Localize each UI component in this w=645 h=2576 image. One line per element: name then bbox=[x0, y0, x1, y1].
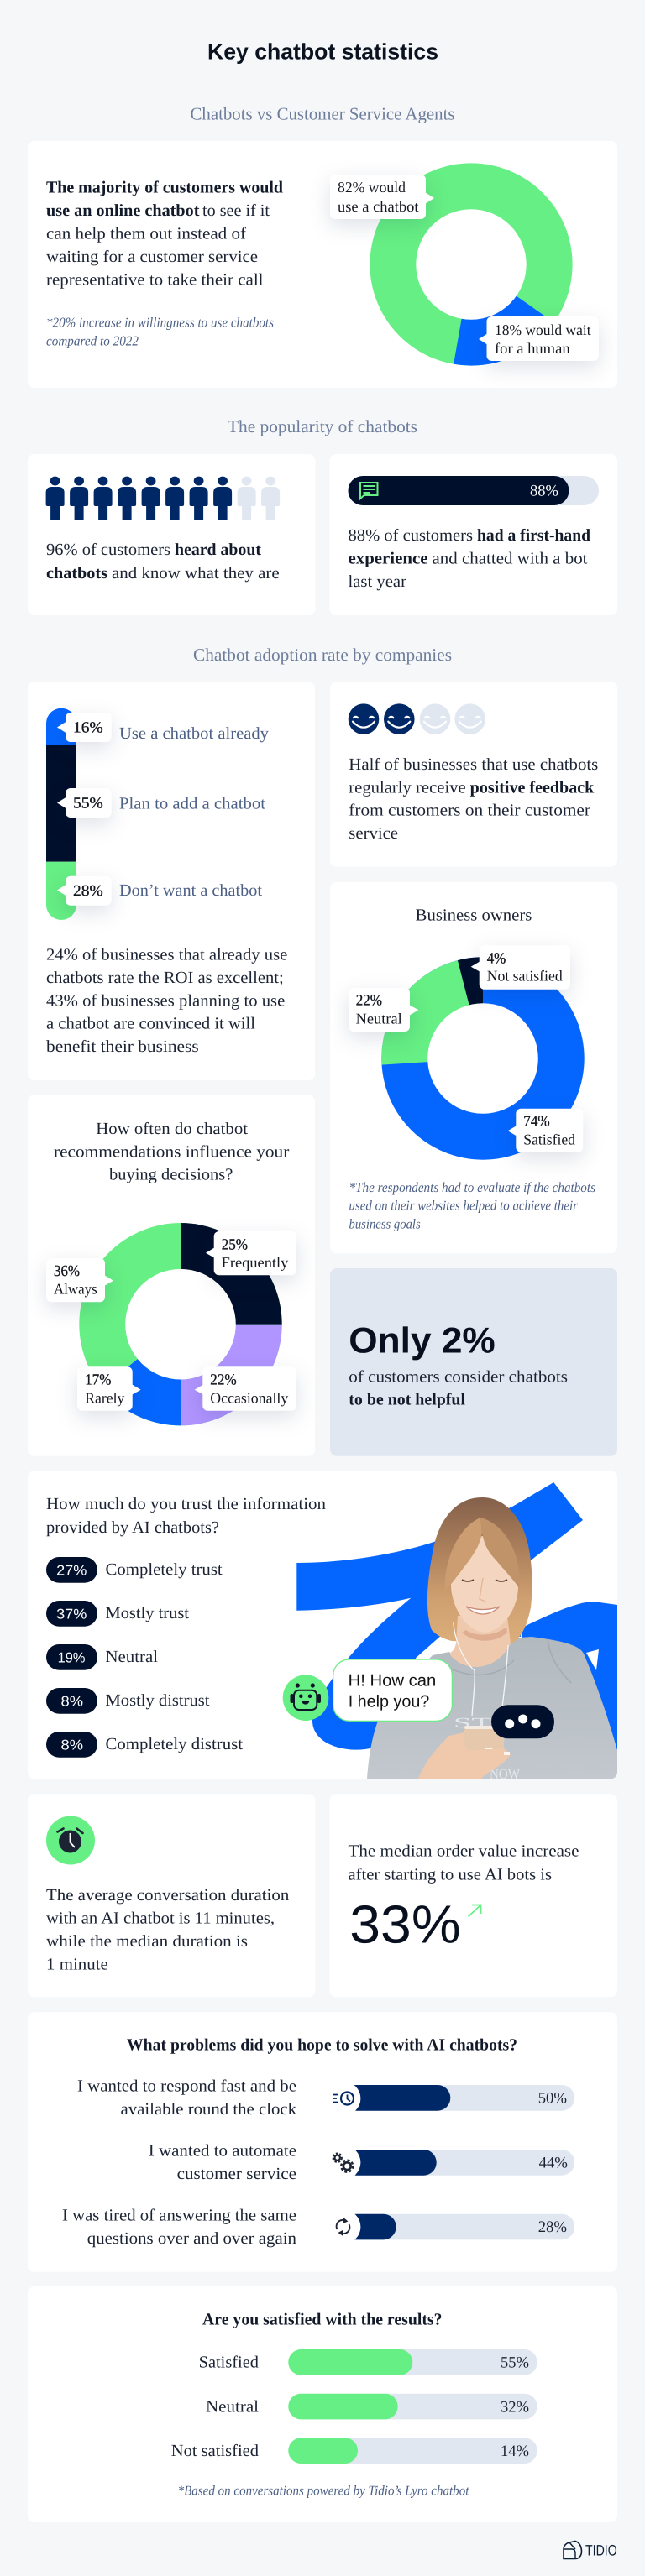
row: satisfied bbox=[199, 2349, 538, 2375]
heading: chatbots vs agents: Chatbots vs Customer Service Agents bbox=[190, 104, 455, 124]
chat bubble: hello: I help you? bbox=[349, 1693, 429, 1711]
illustration: woman with phone and chat bubbles: NOW bbox=[490, 1766, 521, 1782]
heading: business owners: Business owners bbox=[416, 907, 532, 925]
heading: buying decisions question: buying decisions? bbox=[109, 1166, 233, 1184]
logo: Tidio: TIDIO bbox=[585, 2542, 617, 2559]
text: first-hand experience bbox=[348, 526, 590, 591]
icon: fast clock bbox=[327, 2082, 360, 2115]
heading: trust question: How much do you trust the information bbox=[46, 1495, 326, 1513]
text: positive feedback: positive feedback bbox=[470, 778, 595, 797]
progress bar: 88% bbox=[348, 476, 599, 505]
text: majority statement: can help them out instead of bbox=[46, 225, 246, 243]
callout: 25% frequently: 25% bbox=[222, 1236, 248, 1253]
text: first-hand experience: 88% of customers bbox=[348, 526, 473, 545]
text: not helpful: to be not helpful bbox=[349, 1390, 465, 1408]
callout: 16% bbox=[57, 713, 112, 742]
illustration: woman with phone and chat bubbles: ST bbox=[454, 1715, 492, 1731]
callout: 4%: 4% bbox=[487, 950, 506, 967]
callout: 36% always: 36% bbox=[54, 1263, 80, 1280]
panel: first-hand experience bbox=[329, 454, 617, 615]
callout: 22% occasionally: Occasionally bbox=[210, 1389, 288, 1406]
text: not helpful bbox=[349, 1368, 568, 1408]
row: 27% completely trust: Completely trust bbox=[106, 1560, 223, 1579]
icon: chat document bbox=[360, 483, 378, 499]
row: satisfied: Satisfied bbox=[199, 2354, 259, 2372]
row: not satisfied bbox=[171, 2438, 538, 2464]
icon row: smileys bbox=[349, 703, 485, 734]
icon row: people 96% bbox=[46, 477, 280, 520]
text: heard about chatbots: 96% of customers bbox=[46, 541, 170, 559]
row: not satisfied: 14% bbox=[501, 2443, 529, 2460]
callout: 4%: Not satisfied bbox=[487, 968, 563, 985]
note: willingness increase: *20% increase in willingness to use chatbots bbox=[46, 314, 274, 331]
callout: 36% always bbox=[46, 1258, 113, 1302]
callout: 22% occasionally: 22% bbox=[210, 1372, 237, 1388]
callout: 82%: 82% would bbox=[338, 179, 406, 196]
text: order value bbox=[348, 1842, 579, 1884]
progress bar: 88%: 88% bbox=[530, 482, 558, 500]
panel: chatbots vs agents bbox=[28, 141, 617, 388]
callout: 55% bbox=[57, 788, 112, 818]
row: 27% completely trust: 27% bbox=[56, 1562, 87, 1578]
heading: trust question bbox=[46, 1495, 326, 1537]
text: majority statement bbox=[46, 178, 283, 289]
callout: 18% bbox=[479, 316, 599, 361]
row: respond fast bbox=[77, 2077, 574, 2119]
panel: business owners bbox=[330, 882, 617, 1253]
text: duration: 1 minute bbox=[46, 1956, 108, 1974]
label: don't want: Don’t want a chatbot bbox=[119, 881, 262, 900]
text: majority statement: waiting for a customer service bbox=[46, 248, 258, 266]
row: not satisfied: Not satisfied bbox=[171, 2442, 259, 2460]
text: heard about chatbots bbox=[46, 541, 280, 583]
icon: alarm clock bbox=[46, 1816, 95, 1865]
text: ROI paragraph: benefit their business bbox=[46, 1037, 199, 1056]
text: duration: while the median duration is bbox=[46, 1932, 248, 1951]
callout: 16%: 16% bbox=[73, 720, 103, 737]
row: tired of answering: I was tired of answering the same bbox=[62, 2207, 296, 2225]
text: heard about chatbots: heard about bbox=[175, 541, 261, 559]
panel: order value increase bbox=[329, 1794, 617, 1997]
callout: 22% occasionally bbox=[195, 1366, 296, 1411]
donut chart: chatbot vs human bbox=[370, 163, 573, 366]
text: first-hand experience: experience bbox=[348, 549, 428, 567]
callout: 55%: 55% bbox=[73, 796, 103, 813]
callout: 82% bbox=[330, 175, 434, 219]
text: duration bbox=[46, 1886, 289, 1974]
row: neutral: Neutral bbox=[206, 2397, 259, 2416]
donut chart: owners satisfaction bbox=[381, 957, 585, 1160]
row: 8% completely distrust: 8% bbox=[60, 1737, 83, 1753]
row: 8% mostly distrust: Mostly distrust bbox=[106, 1691, 210, 1710]
text: ROI paragraph bbox=[46, 946, 287, 1056]
callout: 4% bbox=[471, 945, 570, 990]
text: duration: The average conversation duration bbox=[46, 1886, 289, 1905]
row: automate: 44% bbox=[539, 2154, 568, 2171]
callout: 28% bbox=[57, 876, 112, 906]
icon: gears bbox=[327, 2145, 360, 2179]
row: 37% mostly trust: 37% bbox=[56, 1606, 87, 1622]
panel: trust in AI chatbots bbox=[28, 1471, 617, 1782]
row: tired of answering: 28% bbox=[538, 2218, 567, 2236]
row: 37% mostly trust: Mostly trust bbox=[106, 1604, 189, 1622]
heading: satisfied question: Are you satisfied with the results? bbox=[202, 2310, 442, 2328]
row: respond fast: 50% bbox=[538, 2090, 567, 2108]
panel: conversation duration bbox=[28, 1794, 316, 1997]
callout: 82%: use a chatbot bbox=[338, 198, 418, 215]
callout: 74% satisfied bbox=[508, 1109, 583, 1152]
callout: 74% satisfied: Satisfied bbox=[523, 1131, 575, 1147]
row: respond fast: I wanted to respond fast and be bbox=[77, 2077, 296, 2096]
panel: positive feedback bbox=[330, 682, 617, 867]
title: Key chatbot statistics bbox=[207, 39, 438, 65]
stacked bar bbox=[46, 708, 76, 920]
callout: 28%: 28% bbox=[73, 883, 103, 900]
text: ROI paragraph: chatbots rate the ROI as excellent; bbox=[46, 969, 284, 987]
panel: buying decisions bbox=[28, 1095, 315, 1456]
text: ROI paragraph: 43% of businesses planning to use bbox=[46, 991, 285, 1010]
panel: satisfaction with results bbox=[28, 2286, 617, 2522]
illustration: woman with phone and chat bubbles bbox=[283, 1482, 617, 1782]
heading: adoption rate: Chatbot adoption rate by companies bbox=[193, 645, 452, 665]
text: ROI paragraph: 24% of businesses that already use bbox=[46, 946, 287, 964]
heading: trust question: provided by AI chatbots? bbox=[46, 1518, 219, 1537]
note: willingness increase: compared to 2022 bbox=[46, 332, 139, 349]
text: first-hand experience: had a first-hand bbox=[477, 526, 590, 545]
row: 8% completely distrust: Completely distrust bbox=[106, 1735, 243, 1753]
logo: Tidio bbox=[564, 2542, 617, 2559]
icon: up arrow bbox=[469, 1905, 480, 1917]
note: respondents: business goals bbox=[349, 1216, 421, 1232]
callout: 74% satisfied: 74% bbox=[523, 1114, 550, 1131]
row: satisfied: 55% bbox=[501, 2354, 529, 2372]
note: respondents: used on their websites helped to achieve their bbox=[349, 1198, 579, 1214]
row: 19% neutral bbox=[46, 1644, 158, 1670]
heading: popularity: The popularity of chatbots bbox=[228, 416, 417, 436]
heading: buying decisions question bbox=[54, 1120, 290, 1184]
row: 8% completely distrust bbox=[46, 1732, 243, 1758]
callout: 17% rarely: Rarely bbox=[85, 1389, 124, 1406]
callout: 22% neutral bbox=[349, 988, 418, 1032]
callout: 36% always: Always bbox=[54, 1281, 97, 1298]
row: automate bbox=[149, 2142, 574, 2183]
text: duration: with an AI chatbot is 11 minutes, bbox=[46, 1910, 275, 1928]
row: tired of answering bbox=[62, 2207, 574, 2248]
text: positive feedback: Half of businesses that use chatbots bbox=[349, 755, 599, 774]
heading: buying decisions question: How often do chatbot bbox=[96, 1120, 248, 1138]
row: automate: I wanted to automate bbox=[149, 2142, 296, 2161]
row: tired of answering: questions over and over again bbox=[87, 2229, 296, 2248]
text: majority statement: representative to take their call bbox=[46, 270, 264, 289]
icon: robot bbox=[283, 1675, 328, 1721]
text: positive feedback: from customers on their customer bbox=[349, 802, 590, 820]
text: positive feedback: regularly receive bbox=[349, 778, 466, 797]
chat bubble: hello bbox=[333, 1659, 452, 1721]
icon: refresh bbox=[327, 2210, 360, 2244]
panel: only 2% bbox=[330, 1268, 617, 1456]
text: first-hand experience: last year bbox=[348, 572, 406, 591]
panel: heard about chatbots bbox=[28, 454, 316, 615]
text: majority statement: use an online chatbot bbox=[46, 201, 200, 220]
text: positive feedback: service bbox=[349, 824, 398, 843]
row: 19% neutral: Neutral bbox=[106, 1648, 158, 1666]
callout: 18%: 18% would wait bbox=[495, 321, 591, 338]
text: order value: The median order value increase bbox=[348, 1842, 579, 1861]
note: respondents: *The respondents had to evaluate if the chatbots bbox=[349, 1179, 595, 1195]
text: positive feedback bbox=[349, 755, 599, 843]
panel: problems to solve bbox=[28, 2012, 617, 2272]
row: 37% mostly trust bbox=[46, 1601, 189, 1627]
label: plan to add: Plan to add a chatbot bbox=[119, 795, 265, 813]
callout: 22% neutral: 22% bbox=[356, 993, 382, 1010]
chat bubble: dark typing bbox=[491, 1705, 554, 1738]
callout: 18%: for a human bbox=[495, 340, 570, 357]
text: order value: after starting to use AI bots is bbox=[348, 1865, 552, 1884]
note: willingness increase bbox=[46, 314, 274, 349]
callout: 22% neutral: Neutral bbox=[356, 1010, 402, 1027]
text: first-hand experience: and chatted with a bot bbox=[432, 549, 588, 567]
text: ROI paragraph: a chatbot are convinced it will bbox=[46, 1015, 255, 1033]
callout: 17% rarely bbox=[77, 1366, 141, 1411]
chat bubble: hello: H! How can bbox=[349, 1672, 436, 1690]
row: neutral: 32% bbox=[501, 2398, 529, 2416]
label: use a chatbot: Use a chatbot already bbox=[119, 724, 269, 743]
heading: problems question: What problems did you hope to solve with AI chatbots? bbox=[127, 2035, 517, 2054]
callout: 17% rarely: 17% bbox=[85, 1372, 111, 1388]
row: 8% mostly distrust: 8% bbox=[60, 1693, 83, 1709]
text: majority statement: The majority of customers would bbox=[46, 178, 283, 196]
donut chart: recommendation frequency bbox=[79, 1223, 282, 1425]
note: respondents bbox=[349, 1179, 595, 1232]
row: respond fast: available round the clock bbox=[121, 2100, 296, 2119]
text: heard about chatbots: and know what they are bbox=[112, 564, 280, 583]
row: automate: customer service bbox=[177, 2165, 296, 2183]
panel: adoption stacked bar bbox=[28, 682, 315, 1080]
big stat: only 2%: Only 2% bbox=[349, 1321, 496, 1361]
text: majority statement: to see if it bbox=[202, 201, 270, 220]
heading: buying decisions question: recommendations influence your bbox=[54, 1142, 290, 1161]
callout: 25% frequently bbox=[206, 1231, 296, 1275]
big stat: 33%: 33% bbox=[349, 1894, 461, 1954]
callout: 25% frequently: Frequently bbox=[222, 1254, 288, 1271]
text: heard about chatbots: chatbots bbox=[46, 564, 108, 583]
note: based on conversations: *Based on conversations powered by Tidio’s Lyro chatbot bbox=[178, 2483, 469, 2499]
row: neutral bbox=[206, 2394, 538, 2419]
row: 8% mostly distrust bbox=[46, 1688, 210, 1714]
text: not helpful: of customers consider chatbots bbox=[349, 1368, 568, 1387]
row: 27% completely trust bbox=[46, 1557, 223, 1583]
row: 19% neutral: 19% bbox=[58, 1649, 85, 1665]
